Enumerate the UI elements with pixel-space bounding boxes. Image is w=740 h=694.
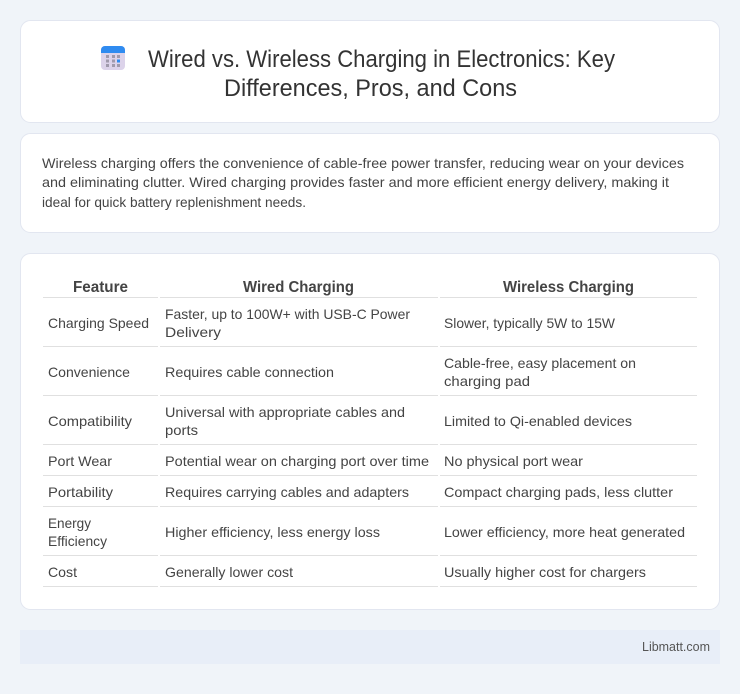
intro text: ideal for quick battery replenishment needs. xyxy=(42,194,306,210)
row: compatibility: Limited to Qi-enabled devices xyxy=(444,413,632,429)
row: convenience: Requires cable connection xyxy=(165,364,334,380)
header panel xyxy=(20,20,720,122)
intro text: Wireless charging offers the convenience of cable-free power transfer, reducing wear on your devices xyxy=(42,155,684,171)
row: convenience: charging pad xyxy=(444,373,530,389)
intro panel xyxy=(20,134,720,232)
title xyxy=(148,46,615,102)
row: compatibility: Universal with appropriate cables and xyxy=(165,404,405,420)
title: Differences, Pros, and Cons xyxy=(224,75,517,102)
intro text: and eliminating clutter. Wired charging provides faster and more efficient energy delivery, making it xyxy=(42,174,669,190)
row: energy efficiency xyxy=(48,515,685,549)
row: compatibility xyxy=(48,404,632,438)
footer bar xyxy=(20,630,720,664)
table header row: Wired Charging xyxy=(243,279,354,296)
row: energy efficiency: Energy xyxy=(48,515,91,531)
row: port wear: Potential wear on charging port over time xyxy=(165,453,429,469)
row: convenience: Cable-free, easy placement on xyxy=(444,355,636,371)
row: energy efficiency: Higher efficiency, less energy loss xyxy=(165,524,380,540)
row: compatibility: Compatibility xyxy=(48,413,132,429)
row: cost: Generally lower cost xyxy=(165,564,293,580)
table header row: Feature xyxy=(73,279,128,296)
row: port wear xyxy=(48,453,583,469)
row: convenience: Convenience xyxy=(48,364,130,380)
row: charging speed: Slower, typically 5W to 15W xyxy=(444,315,616,331)
row: charging speed: Faster, up to 100W+ with USB-C Power xyxy=(165,306,410,322)
icon: calendar grid xyxy=(101,46,125,70)
row: convenience xyxy=(48,355,636,389)
row: cost: Cost xyxy=(48,564,77,580)
row: port wear: Port Wear xyxy=(48,453,112,469)
footer credit: Libmatt.com xyxy=(642,640,710,654)
row: charging speed: Charging Speed xyxy=(48,315,149,331)
row: portability: Requires carrying cables and adapters xyxy=(165,484,409,500)
title: Wired vs. Wireless Charging in Electronics: Key xyxy=(148,46,615,73)
row: cost xyxy=(48,564,646,580)
row: portability: Compact charging pads, less clutter xyxy=(444,484,673,500)
row: port wear: No physical port wear xyxy=(444,453,583,469)
row: portability xyxy=(48,484,673,500)
row: cost: Usually higher cost for chargers xyxy=(444,564,646,580)
row: energy efficiency: Lower efficiency, more heat generated xyxy=(444,524,685,540)
table header row: Wireless Charging xyxy=(503,279,634,296)
row: charging speed xyxy=(48,306,616,340)
intro text xyxy=(42,155,684,210)
table header row xyxy=(73,279,634,296)
comparison table panel xyxy=(20,254,720,610)
row: energy efficiency: Efficiency xyxy=(48,533,107,549)
row: portability: Portability xyxy=(48,484,113,500)
row: compatibility: ports xyxy=(165,422,198,438)
row: charging speed: Delivery xyxy=(165,324,221,340)
